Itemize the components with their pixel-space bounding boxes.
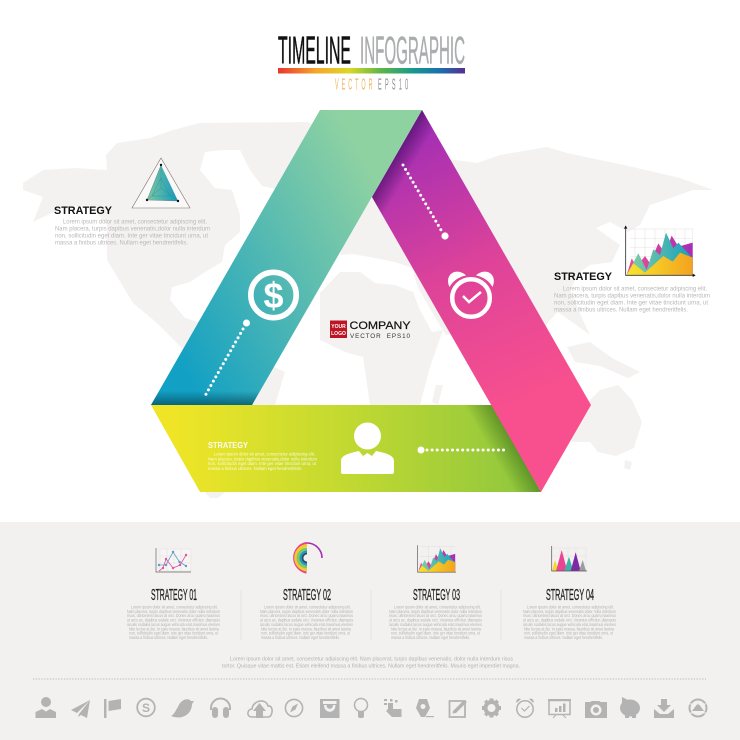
strategy text in green band: STRATEGY: [208, 441, 249, 450]
paragraph 02: Lorem ipsum dolor sit amet, consectetur adipiscing elit.: [264, 604, 351, 610]
paragraph 03: Nite lectus at dui. In justo massa, faucibus sit amet lacinia: [391, 626, 481, 631]
paragraph 04: Nam placera, turpis dapibus venenatis dolor nulla interdum: [523, 609, 616, 614]
icon: camera: [585, 701, 607, 718]
logo box: YOUR: [331, 324, 346, 330]
icon: person: [36, 697, 56, 718]
strategy text in green band: [208, 441, 317, 471]
paragraph 01: Nite lectus at dui. In justo massa, faucibus sit amet lacinia: [129, 626, 219, 631]
right paragraph: non, sollicitudin eget diam. Inte ger vitae tincidunt urna, ut: [554, 300, 708, 306]
right strategy block: [554, 271, 710, 314]
paragraph 03: Lorem ipsum dolor sit amet, consectetur adipiscing elit.: [394, 604, 481, 610]
right area chart icon: [624, 225, 696, 277]
icon: triangle chart: [552, 546, 587, 571]
icon: person: [341, 422, 394, 474]
paragraph 01: iaculis sodales,lacus augue vehicula erat,maximus elemen: [127, 622, 220, 627]
strategy 02 column: STRATEGY 02: [283, 587, 331, 604]
strategy 03 column: [389, 545, 483, 640]
icon: dollar coin: [251, 272, 296, 318]
company name: COMPANY: [350, 320, 411, 332]
icon: area chart: [418, 545, 456, 572]
paragraph 04: Lorem ipsum dolor sit amet, consectetur adipiscing elit.: [527, 604, 614, 610]
company logo: [330, 320, 411, 340]
dotted line teal: [206, 329, 243, 395]
paragraph 04: ut arcu ac, dapibus sodale orci. Vivamus efficitur, diamquis: [523, 618, 617, 623]
icon: compass: [285, 699, 303, 717]
strategy text in green band: non, sollicitudin eget diam. Inte ger vitae tincidunt urna, ut: [208, 461, 317, 466]
icon: download: [654, 699, 674, 718]
strategy 04 column: STRATEGY 04: [546, 587, 594, 604]
icon: twitter bird: [171, 699, 194, 718]
paragraph 01: Lorem ipsum dolor sit amet, consectetur adipiscing elit.: [131, 604, 218, 610]
icon: alarm clock: [516, 699, 534, 717]
icon: gear: [482, 698, 501, 718]
title: [278, 30, 465, 94]
radar chart icon: [132, 158, 190, 208]
paragraph 01: ut arcu ac, dapibus sodale orci. Vivamus efficitur, diamquis: [127, 618, 221, 623]
paragraph 02: massa a finibus ultrices. Nullam eget hendreritfelis.: [261, 635, 340, 640]
icon: touch hand: [384, 699, 402, 717]
strategy 01 column: STRATEGY 01: [151, 587, 197, 604]
left heading: STRATEGY: [54, 205, 112, 217]
paragraph 04: iaculis sodales,lacus augue vehicula erat,maximus elemen: [523, 622, 616, 627]
icon: notepad: [450, 700, 467, 717]
strategy text in green band: massa a finibus ultrices. Nullam eget hendreritfelis.: [208, 466, 302, 471]
paragraph 01: Nam placera, turpis dapibus venenatis dolor nulla interdum: [127, 609, 220, 614]
left paragraph: Nam placera, turpis dapibus venenatis,dolor nulla interdum: [55, 226, 210, 232]
paragraph 03: iaculis sodales,lacus augue vehicula erat,maximus elemen: [389, 622, 482, 627]
text: INFOGRAPHIC: [360, 30, 465, 72]
right paragraph: Lorem ipsum dolor sit amet, consectetur adipiscing elit.: [563, 286, 707, 292]
icon: line chart: [156, 548, 191, 572]
paragraph 02: Nite lectus at dui. In justo massa, faucibus sit amet lacinia: [261, 626, 351, 631]
logo box: LOGO: [331, 331, 346, 337]
paragraph 01: massa a finibus ultrices. Nullam eget hendreritfelis.: [129, 635, 208, 640]
paragraph 01: non, sollicitudin eget diam. Inte ger vitae tincidunt urna, ut: [129, 631, 219, 636]
paragraph 02: non, sollicitudin eget diam. Inte ger vitae tincidunt urna, ut: [261, 631, 351, 636]
icon: alarm clock: [448, 272, 494, 317]
right paragraph: massa a finibus ultrices. Nullam eget hendreritfelis.: [554, 306, 688, 314]
strategy 03 column: STRATEGY 03: [413, 587, 460, 604]
icon: cloud upload: [248, 701, 272, 718]
icon: dollar coin: $: [263, 275, 284, 316]
subtitle vector: VECTOR: [335, 76, 376, 94]
strategy text in green band: Lorem ipsum dolor sit amet, consectetur adipiscing elit.: [214, 452, 315, 456]
paragraph 02: ut arcu ac, dapibus sodale orci. Vivamus efficitur, diamquis: [260, 618, 354, 623]
subtitle eps10: EPS10: [378, 76, 412, 94]
paragraph 03: ut arcu ac, dapibus sodale orci. Vivamus efficitur, diamquis: [389, 618, 483, 623]
icon: paper plane: [71, 700, 90, 718]
paragraph 02: [260, 604, 354, 640]
dotted separator: [33, 678, 706, 680]
panel: teal band: [151, 110, 422, 405]
left paragraph: massa a finibus ultrices. Nullam eget hendreritfelis.: [55, 240, 188, 246]
paragraph 02: Nam placera, turpis dapibus venenatis dolor nulla interdum: [260, 609, 353, 614]
icon: presentation: [548, 699, 571, 718]
icon: box: [320, 699, 340, 718]
dotted line magenta: [403, 165, 441, 230]
paragraph 03: risus, ultricesnisi lacus at orci. Donec arcu quam,maximus: [389, 613, 483, 618]
left strategy block: [54, 205, 210, 246]
icon: headphones: [211, 698, 230, 718]
paragraph 04: Nite lectus at dui. In justo massa, faucibus sit amet lacinia: [524, 626, 614, 631]
right paragraph: [554, 286, 710, 314]
paragraph 01: risus, ultricesnisi lacus at orci. Donec arcu quam,maximus: [127, 613, 221, 618]
icon: piggy bank: [620, 697, 640, 718]
strategy text in green band: Nam placera, turpis dapibus venenatis,dolor nulla interdum: [208, 456, 317, 461]
rainbow bar: [278, 68, 465, 74]
icon: dollar: S: [142, 701, 150, 715]
left paragraph: [55, 218, 210, 246]
paragraph 03: massa a finibus ultrices. Nullam eget hendreritfelis.: [391, 635, 470, 640]
strategy 04 column: [523, 546, 617, 640]
panel: magenta band: [372, 110, 591, 492]
icon: light bulb: [354, 698, 368, 718]
panel: bottom background: [0, 522, 740, 740]
left paragraph: non, sollicitudin eget diam. Inte ger vitae tincidunt urna, ut: [55, 232, 208, 240]
paragraph 03: Nam placera, turpis dapibus venenatis dolor nulla interdum: [389, 609, 482, 614]
title: TIMELINE: [278, 30, 351, 72]
dividers: [241, 590, 501, 640]
icon: rainbow arcs: [294, 543, 322, 572]
icon: pie globe: [689, 700, 706, 716]
paragraph 04: non, sollicitudin eget diam. Inte ger vitae tincidunt urna, ut: [524, 631, 614, 636]
world map background: [23, 122, 713, 498]
paragraph 04: [523, 604, 617, 640]
right paragraph: Nam placera, turpis dapibus venenatis,dolor nulla interdum: [554, 292, 710, 300]
icon: dollar: [137, 699, 155, 716]
paragraph 03: [389, 604, 483, 640]
right heading: STRATEGY: [554, 271, 612, 283]
paragraph 03: non, sollicitudin eget diam. Inte ger vitae tincidunt urna, ut: [391, 631, 481, 636]
panel: green band: [151, 405, 541, 492]
center paragraph: [222, 656, 520, 670]
paragraph 01: [127, 604, 221, 640]
paragraph 02: risus, ultricesnisi lacus at orci. Donec arcu quam,maximus: [260, 613, 354, 618]
paragraph 02: iaculis sodales,lacus augue vehicula erat,maximus elemen: [260, 622, 353, 627]
company tagline: VECTOR EPS10: [350, 333, 410, 340]
center paragraph: tortor. Quisque vitae mattis est. Etiam eleifend massa a finibus ultrices. Nullam eget hendreritfelis. Mauris eget imperdiet magna.: [222, 664, 520, 670]
icon: flag: [104, 699, 121, 718]
paragraph 04: massa a finibus ultrices. Nullam eget hendreritfelis.: [524, 635, 603, 640]
icon row: [36, 697, 706, 718]
dotted line green: [427, 448, 504, 452]
paragraph 04: risus, ultricesnisi lacus at orci. Donec arcu quam,maximus: [523, 613, 617, 618]
strategy 02 column: [260, 543, 354, 640]
icon: pen nib: [416, 699, 434, 717]
left paragraph: Lorem ipsum dolor sit amet, consectetur adipiscing elit.: [63, 218, 207, 226]
center paragraph: Lorem ipsum dolor sit amet, consectetur adipiscing elit. Nam placerat, turpis dapibus venenatis, dolor nulla interdum risus: [230, 656, 513, 662]
logo box: [330, 320, 347, 338]
strategy 01 column: [127, 548, 221, 640]
